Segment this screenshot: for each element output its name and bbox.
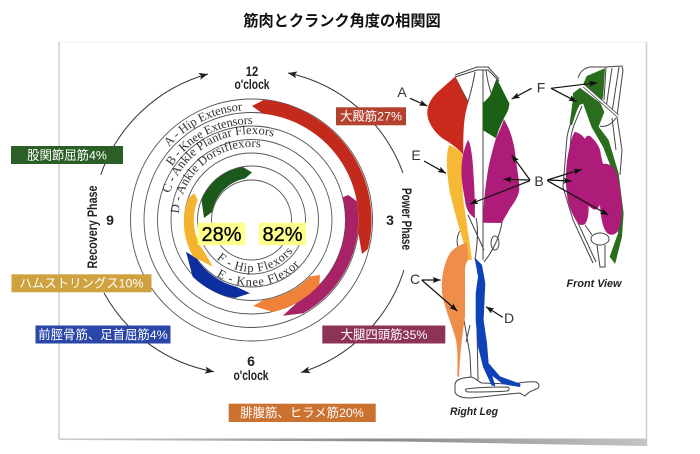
- muscle A: [427, 77, 468, 155]
- arc C: ankle plantar flexors: [253, 275, 320, 312]
- leg callout letters and arrows: E: [411, 147, 421, 163]
- label: hamstrings: ハムストリングス10%: [20, 277, 143, 291]
- arc F: hip flexors: [202, 167, 252, 218]
- caption front view: Front View: [566, 278, 623, 290]
- arc yellow: hip flexor band: [184, 193, 213, 267]
- panel: diagram sheet: [59, 42, 647, 446]
- label: hip flexor: 股関節屈筋4%: [27, 147, 107, 162]
- leg callout letters and arrows: [397, 80, 608, 326]
- leg callout letters and arrows: F: [537, 80, 545, 96]
- front bone strip: [584, 86, 618, 116]
- recovery phase label: Recovery Phase: [84, 185, 100, 268]
- ring label E: E - Knee Flexor: [216, 261, 299, 286]
- ring label D: D - Ankle Dorsiflexors: [170, 141, 260, 214]
- front muscle F lower: [570, 88, 623, 263]
- arc A: hip extensor: [252, 100, 372, 254]
- label: tibialis: 前脛骨筋、足首屈筋4%: [38, 327, 168, 342]
- front outlines: [563, 66, 623, 267]
- power phase label: Power Phase: [399, 188, 415, 250]
- leg outlines: [455, 67, 539, 398]
- percent badge 82%: 82%: [262, 224, 303, 246]
- title: 筋肉とクランク角度の相関図: [243, 12, 441, 30]
- muscle C: [442, 243, 468, 377]
- clock labels: 6: [247, 353, 255, 369]
- arc B: knee extensors: [283, 195, 358, 316]
- leg callout letters and arrows: D: [504, 310, 514, 326]
- front muscle F upper: [583, 68, 605, 103]
- arc E: knee flexor: [186, 252, 250, 298]
- concentric rings: [130, 99, 372, 341]
- muscle F: [483, 78, 509, 138]
- leg callout letters and arrows: B: [534, 173, 544, 189]
- label: hip flexor: [11, 146, 123, 164]
- label: quadriceps: [322, 326, 445, 344]
- leg callout letters and arrows: C: [410, 271, 420, 287]
- front muscle B: [566, 132, 622, 235]
- ring label F: F - Hip Flexors: [216, 248, 292, 275]
- anatomy: right leg: [427, 67, 539, 398]
- clock labels: [106, 63, 394, 383]
- percent badge 28%: 28%: [201, 224, 242, 246]
- ring label B: B - Knee Extensors: [165, 118, 252, 166]
- ring label A: A - Hip Extensor: [166, 104, 242, 147]
- muscle E: [447, 145, 472, 260]
- ring label C: C - Ankle Plantar Flexors: [163, 126, 274, 192]
- label: calf: 腓腹筋、ヒラメ筋20%: [240, 405, 364, 420]
- label: hamstrings: [12, 274, 152, 292]
- caption right leg: Right Leg: [450, 406, 498, 418]
- muscle B outer: [483, 119, 519, 223]
- clock labels: 3: [386, 212, 394, 228]
- label: calf: [229, 404, 376, 422]
- chart: crank angle rings: [130, 98, 373, 342]
- label: quadriceps: 大腿四頭筋35%: [341, 327, 427, 342]
- phase arrows: [101, 73, 404, 372]
- leg callout letters and arrows: A: [397, 84, 407, 100]
- clock labels: 9: [106, 212, 114, 228]
- clock labels: o'clock: [234, 76, 270, 92]
- muscle D: [475, 258, 520, 387]
- clock labels: 12: [246, 63, 258, 79]
- muscle B inner: [461, 140, 475, 218]
- anatomy: front view: [563, 66, 623, 267]
- label: gluteus: 大殿筋27%: [340, 109, 402, 124]
- clock labels: o'clock: [234, 367, 269, 383]
- label: gluteus: [336, 107, 406, 125]
